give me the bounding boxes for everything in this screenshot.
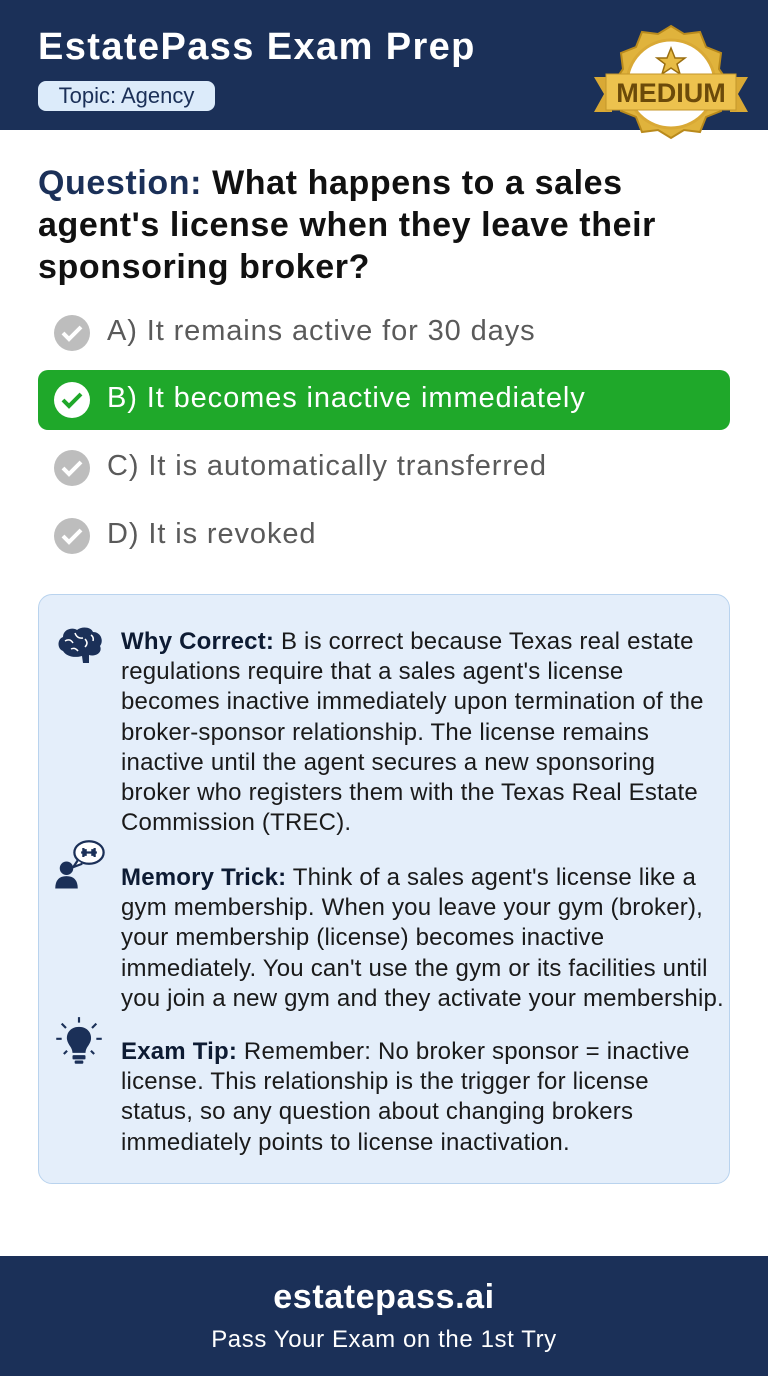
option B correct [38, 370, 730, 430]
text: exam tip: immediately points to license inactivation. [121, 1129, 570, 1156]
icon: lightbulb [56, 1017, 102, 1064]
text: memory trick: Memory Trick: Think of a sales agent's license like a [121, 864, 696, 891]
text: memory trick: your membership (license) becomes inactive [121, 924, 604, 951]
text: why correct: broker-sponsor relationship. The license remains [121, 719, 649, 746]
question: sponsoring broker? [38, 248, 370, 286]
text: why correct: broker who registers them with the Texas Real Estate [121, 779, 698, 806]
text: why correct: regulations require that a sales agent's license [121, 658, 623, 685]
badge: medium [594, 24, 748, 140]
topic pill [38, 81, 215, 111]
question [38, 164, 656, 286]
question: Question: What happens to a sales [38, 164, 623, 202]
icon: brain [58, 628, 102, 663]
icon: person speech [55, 840, 105, 888]
panel: explanation [38, 594, 730, 1184]
text: exam tip: Exam Tip: Remember: No broker sponsor = inactive [121, 1038, 690, 1065]
text: exam tip [121, 1038, 690, 1156]
text: why correct: becomes inactive immediately upon termination of the [121, 688, 704, 715]
question: agent's license when they leave their [38, 206, 656, 244]
footer [0, 1256, 768, 1376]
text: exam tip: license. This relationship is the trigger for license [121, 1068, 649, 1095]
text: why correct: Commission (TREC). [121, 809, 351, 836]
option C: C) It is automatically transferred [107, 450, 547, 482]
text: memory trick [121, 864, 724, 1012]
text: memory trick: immediately. You can't use the gym or its facilities until [121, 955, 708, 982]
badge: medium: MEDIUM [616, 78, 726, 108]
option A: A) It remains active for 30 days [107, 315, 536, 347]
text: why correct [121, 628, 704, 836]
text: memory trick: you join a new gym and they activate your membership. [121, 985, 724, 1012]
text: why correct: inactive until the agent secures a new sponsoring [121, 749, 655, 776]
footer tagline: Pass Your Exam on the 1st Try [211, 1326, 557, 1353]
option B correct: B) It becomes inactive immediately [107, 382, 586, 414]
topic pill: Topic: Agency [59, 83, 194, 108]
header [0, 0, 768, 130]
option D: D) It is revoked [107, 518, 316, 550]
text: exam tip: status, so any question about changing brokers [121, 1098, 633, 1125]
title: EstatePass Exam Prep [38, 26, 476, 68]
text: memory trick: gym membership. When you leave your gym (broker), [121, 894, 703, 921]
text: why correct: Why Correct: B is correct because Texas real estate [121, 628, 694, 655]
footer brand: estatepass.ai [273, 1278, 495, 1316]
